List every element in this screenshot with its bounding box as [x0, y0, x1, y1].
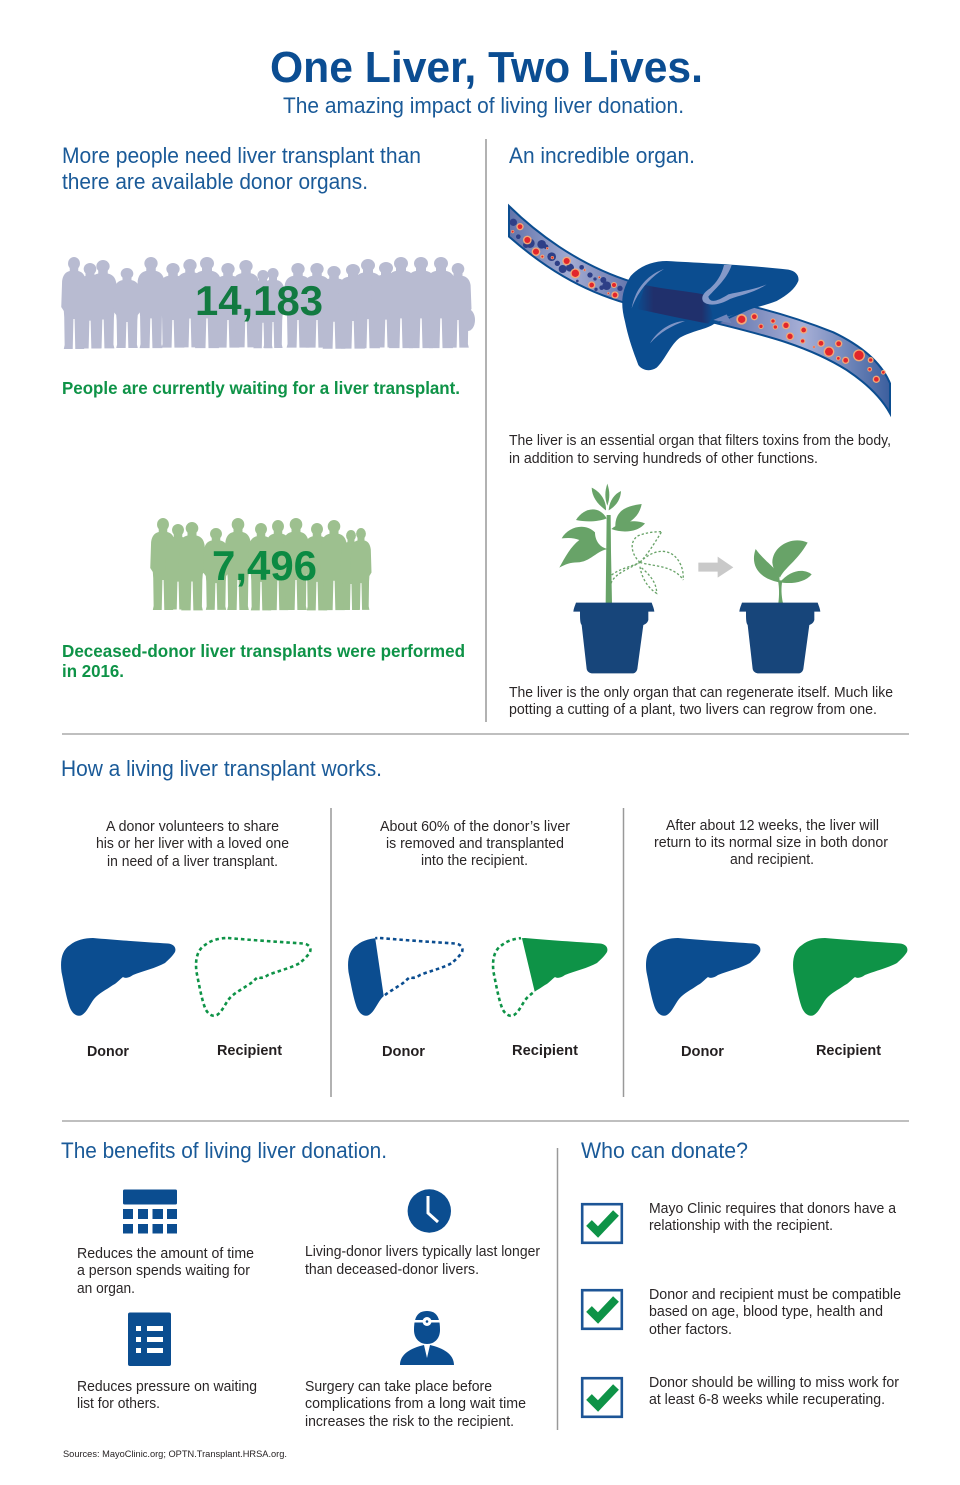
- criterion 3: Donor should be willing to miss work for: [649, 1375, 899, 1391]
- labels: donor and recipient: Donor: [382, 1043, 425, 1060]
- benefit text: pressure: list for others.: [77, 1396, 160, 1412]
- text: liver regeneration: The liver is the only organ that can regenerate itself. Much like: [509, 685, 893, 701]
- step 1 text: [96, 819, 289, 870]
- benefit text: waiting time: Reduces the amount of time: [77, 1246, 254, 1262]
- benefit text: pressure: [77, 1379, 257, 1412]
- labels: donor and recipient: Recipient: [816, 1042, 881, 1059]
- criterion 3: at least 6-8 weeks while recuperating.: [649, 1392, 885, 1408]
- step 3 text: [654, 818, 888, 868]
- benefit text: longevity: [305, 1244, 540, 1278]
- step 2 text: is removed and transplanted: [386, 836, 564, 852]
- labels: donor and recipient: Donor: [681, 1043, 724, 1060]
- labels: donor and recipient: Recipient: [512, 1042, 578, 1059]
- criterion 1: relationship with the recipient.: [649, 1218, 833, 1234]
- heading: need versus supply: there are available donor organs.: [62, 169, 368, 194]
- labels: donor and recipient: [87, 1042, 881, 1060]
- illustration: plant regrowth: [559, 484, 820, 673]
- number: 7,496: 7,496: [212, 542, 317, 589]
- caption: deceased-donor transplants: in 2016.: [62, 661, 124, 681]
- heading: who can donate: Who can donate?: [581, 1138, 748, 1163]
- labels: donor and recipient: Recipient: [217, 1042, 282, 1059]
- criterion 2: Donor and recipient must be compatible: [649, 1287, 901, 1303]
- criterion 1: [649, 1201, 897, 1234]
- liver: step 2 recipient graft: [493, 938, 607, 1016]
- subtitle: The amazing impact of living liver donation.: [283, 93, 684, 118]
- benefit text: pressure: Reduces pressure on waiting: [77, 1379, 257, 1395]
- benefit text: waiting time: a person spends waiting for: [77, 1263, 250, 1279]
- step 3 text: return to its normal size in both donor: [654, 835, 888, 851]
- liver: step 1 donor: [61, 938, 175, 1016]
- labels: donor and recipient: Donor: [87, 1043, 129, 1060]
- icon: surgeon: [400, 1311, 454, 1365]
- criterion 3: [649, 1375, 899, 1408]
- benefit text: surgery timing: [305, 1379, 526, 1430]
- step 2 text: [380, 819, 570, 869]
- icon: clock: [408, 1189, 451, 1233]
- heading: how it works: How a living liver transplant works.: [61, 756, 382, 781]
- sources: Sources: MayoClinic.org; OPTN.Transplant.HRSA.org.: [63, 1449, 287, 1459]
- criterion 1: Mayo Clinic requires that donors have a: [649, 1201, 897, 1217]
- text: liver function: in addition to serving hundreds of other functions.: [509, 451, 818, 467]
- benefit text: longevity: Living-donor livers typically last longer: [305, 1244, 540, 1260]
- icon: calendar: [123, 1190, 177, 1234]
- heading: need versus supply: [62, 143, 421, 194]
- text: liver function: The liver is an essential organ that filters toxins from the body,: [509, 433, 891, 449]
- liver: [622, 261, 799, 370]
- text: liver regeneration: [509, 685, 893, 718]
- step 3 text: and recipient.: [730, 852, 814, 868]
- title: One Liver, Two Lives.: [270, 43, 703, 92]
- criterion 2: [649, 1287, 901, 1338]
- icon: checkbox 3: [582, 1378, 622, 1417]
- criterion 2: based on age, blood type, health and: [649, 1304, 883, 1320]
- illustration: liver filtering blood vessel: [509, 206, 890, 413]
- step 2 text: About 60% of the donor’s liver: [380, 819, 570, 835]
- step 1 text: his or her liver with a loved one: [96, 836, 289, 852]
- icon: checkbox 1: [582, 1204, 622, 1243]
- left pot: [573, 603, 654, 673]
- caption: people waiting: People are currently waiting for a liver transplant.: [62, 378, 460, 398]
- liver: step 1 recipient outline: [196, 938, 310, 1016]
- step 2 text: into the recipient.: [421, 853, 528, 869]
- liver: step 3 donor: [646, 938, 760, 1016]
- icon: checkbox 2: [582, 1290, 622, 1329]
- small plant: [754, 540, 812, 603]
- step 3 text: After about 12 weeks, the liver will: [666, 818, 879, 834]
- caption: deceased-donor transplants: [62, 641, 465, 681]
- right pot: [739, 603, 820, 673]
- criterion 2: other factors.: [649, 1322, 732, 1338]
- benefit text: longevity: than deceased-donor livers.: [305, 1262, 479, 1278]
- blood vessel right: [717, 307, 890, 413]
- dashed removed leaves: [611, 532, 683, 593]
- large plant: [559, 484, 645, 603]
- text: liver regeneration: potting a cutting of a plant, two livers can regrow from one.: [509, 702, 877, 718]
- crowd silhouette: people waiting: [61, 257, 475, 349]
- blood vessel left: [509, 206, 633, 303]
- number: 14,183: 14,183: [195, 277, 323, 324]
- heading: an incredible organ: An incredible organ.: [509, 143, 695, 168]
- heading: benefits: The benefits of living liver donation.: [61, 1138, 387, 1163]
- benefit text: surgery timing: Surgery can take place before: [305, 1379, 492, 1395]
- benefit text: waiting time: [77, 1246, 254, 1297]
- liver: step 3 recipient: [793, 938, 907, 1016]
- step 1 text: A donor volunteers to share: [106, 819, 279, 835]
- text: liver function: [509, 433, 891, 467]
- benefit text: surgery timing: complications from a long wait time: [305, 1396, 526, 1412]
- icon: list: [128, 1312, 171, 1366]
- arrow: [698, 557, 733, 578]
- benefit text: waiting time: an organ.: [77, 1281, 135, 1297]
- benefit text: surgery timing: increases the risk to the recipient.: [305, 1414, 514, 1430]
- step 1 text: in need of a liver transplant.: [107, 854, 278, 870]
- heading: need versus supply: More people need liver transplant than: [62, 143, 421, 168]
- crowd silhouette: deceased-donor transplants: [150, 518, 372, 610]
- caption: deceased-donor transplants: Deceased-donor liver transplants were performed: [62, 641, 465, 661]
- liver: step 2 donor remaining: [348, 938, 462, 1016]
